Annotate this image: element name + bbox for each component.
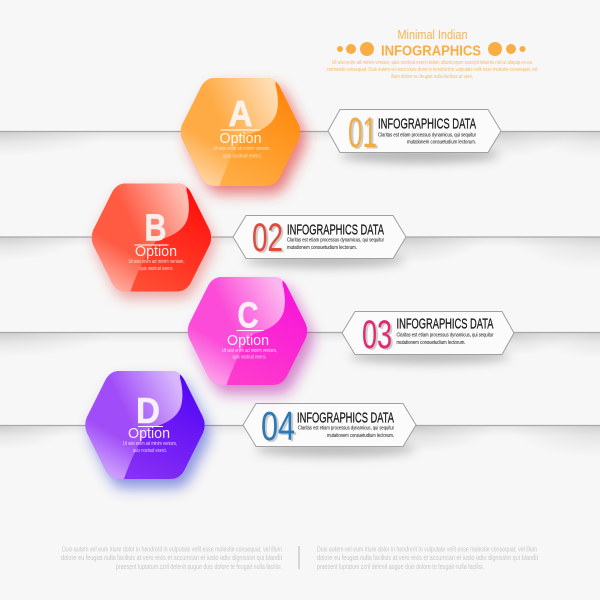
footer text right [317,546,538,571]
number: 02 [252,216,283,260]
hexagon B [82,178,214,298]
number: 04 [263,404,297,450]
connector lines with shading [0,132,600,464]
shadow [95,190,214,298]
label 04 [243,403,416,457]
heading: INFOGRAPHICS DATA [297,410,394,426]
number: 03 [362,313,392,357]
header description: commodo consequat. Duis autem vel eum iriure dolor in hendrerit in vulputate velit esse molestie consequat, vel [326,67,538,73]
label shadow [350,348,510,364]
number [348,109,379,158]
footer text left: praesent luptatum zzril delenit augue duis dolore te feugait nulla facilisi. [116,564,282,571]
footer text left: dolore eu feugiat nulla facilisis at vero eros et accumsan et iusto odio dignissim qui blandit [61,555,282,562]
caption: Ut wisi enim ad minim veniam, [214,146,270,152]
option label: Option [135,243,177,260]
label 03 [342,312,514,364]
body text: mutationem consuetudium lectorum. [396,340,466,346]
header description: illum dolore eu feugiat nulla facilisis at vero, [391,74,473,80]
label box [233,216,406,258]
caption [128,259,184,272]
shadow [187,86,306,194]
label box [243,404,416,446]
number: 02 [254,218,285,262]
underline [236,330,264,331]
shadow [194,286,313,394]
underline [138,426,163,427]
body text [298,426,394,439]
footer text left [61,546,282,571]
body text: Claritas est etiam processus dynamicus, qui sequitur [287,238,384,244]
option label: Option [220,130,262,147]
body text: mutationem consuetudium lectorum. [327,433,394,439]
body text: Claritas est etiam processus dynamicus, qui sequitur [396,332,494,338]
underline [134,244,168,246]
body text: mutationem consuetudium lectorum. [407,140,476,146]
letter: C [238,294,258,336]
option label: Option [128,425,170,442]
caption: quis nostrud exerci. [140,266,174,272]
caption [123,441,177,454]
heading: INFOGRAPHICS DATA [378,116,476,132]
label 01 [328,109,501,163]
header dots [337,42,526,56]
header [326,27,538,80]
footer text right: praesent luptatum zzril delenit augue duis dolore te feugait nulla facilisi. [317,564,484,571]
hexagon C [178,271,313,394]
letter: A [228,93,252,134]
caption [214,146,270,160]
number: 01 [348,109,377,157]
shadow [90,380,210,488]
label 02 [233,216,406,268]
label shadow [255,441,415,457]
caption: quis nostrud exerci. [223,154,262,160]
caption: quis nostrud exerci. [133,448,167,454]
label shadow [245,252,405,268]
letter: B [144,208,166,250]
footer text left: Duis autem vel eum iriure dolor in hendrerit in vulputate velit esse molestie consequat, vel illum [62,546,282,554]
body text: Claritas est etiam processus dynamicus, qui sequitur [378,132,476,138]
header description: Ut wisi enim ad minim veniam, quis nostrud exerci tation ullamcorper suscipit lobortis nisl ut aliquip ex ea [332,60,532,66]
caption: Ut wisi enim ad minim veniam, [222,348,277,354]
option label: Option [227,332,269,349]
number: 01 [350,110,379,158]
footer divider [298,546,300,569]
label shadow [340,147,500,163]
label box [328,110,501,152]
body text [378,132,476,146]
caption: Ut wisi enim ad minim veniam, [123,441,177,447]
body text [287,238,384,251]
caption: quis nostrud exerci. [232,354,266,360]
caption [222,348,277,360]
hexagon body [188,277,308,385]
body text: mutationem consuetudium lectorum. [287,245,357,251]
number: 03 [364,314,394,358]
hexagon A [170,72,306,194]
header title: Minimal Indian: Minimal Indian [398,27,468,42]
label box [342,312,514,354]
underline [220,130,260,131]
hexagon D [75,365,210,488]
letter: D [136,390,160,431]
body text [396,332,494,346]
caption: Ut wisi enim ad minim veniam, [128,259,184,265]
header title: INFOGRAPHICS: INFOGRAPHICS [381,42,481,60]
heading: INFOGRAPHICS DATA [396,316,494,332]
number: 04 [261,403,295,449]
hexagon body [92,184,212,292]
hexagon body [180,78,300,186]
heading: INFOGRAPHICS DATA [287,222,384,238]
hexagon body [85,371,205,479]
header description [326,60,538,80]
footer text right: dolore eu feugiat nulla facilisis at vero eros et accumsan et iusto odio dignissim qui blandit [317,555,538,562]
body text: Claritas est etiam processus dynamicus, qui sequitur [298,426,394,432]
